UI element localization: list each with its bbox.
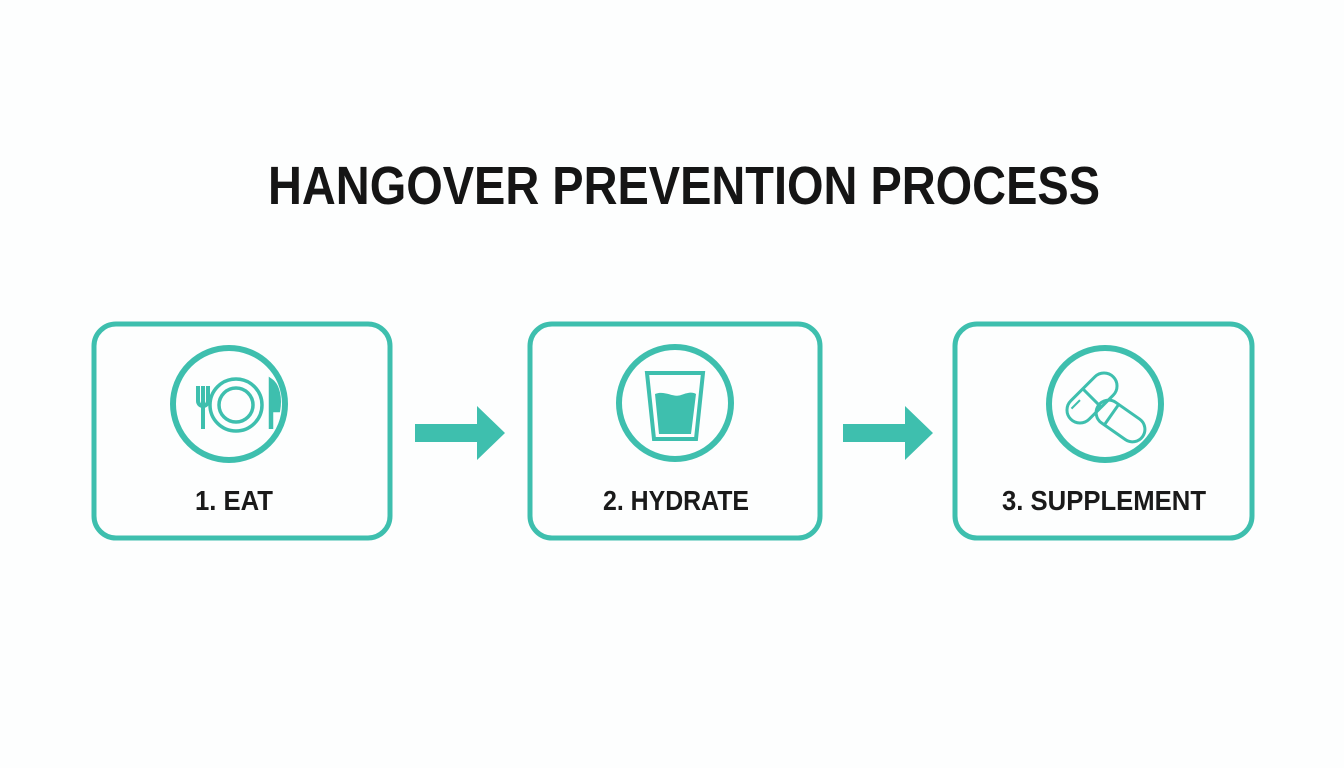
label: eat: 1. EAT: [195, 485, 273, 516]
label: hydrate: 2. HYDRATE: [603, 485, 749, 516]
icon: plate and cutlery: [173, 348, 285, 460]
icon: pills: [1049, 348, 1161, 460]
arrow 2: [843, 406, 933, 460]
panel: eat: [94, 324, 390, 538]
icon: glass of water: [619, 347, 731, 459]
label: supplement: 3. SUPPLEMENT: [1002, 485, 1206, 516]
panel: hydrate: [530, 324, 820, 538]
title: HANGOVER PREVENTION PROCESS: [268, 156, 1100, 216]
arrow 1: [415, 406, 505, 460]
panel: supplement: [955, 324, 1252, 538]
